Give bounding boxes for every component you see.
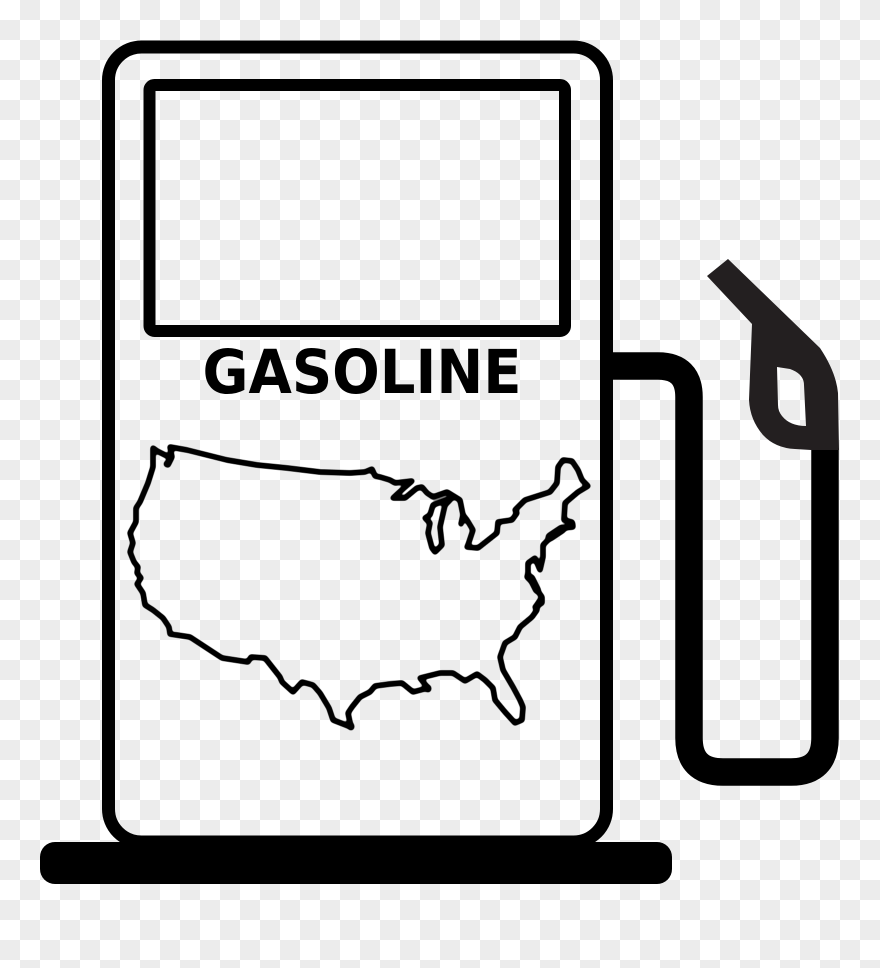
icon: pump body <box>108 47 606 842</box>
price display screen <box>150 85 565 331</box>
hose <box>611 366 825 772</box>
pump base <box>40 842 672 884</box>
icon: fuel nozzle <box>707 259 839 450</box>
map: contiguous United States outline <box>130 447 588 727</box>
heading: gasoline: GASOLINE <box>202 337 522 408</box>
